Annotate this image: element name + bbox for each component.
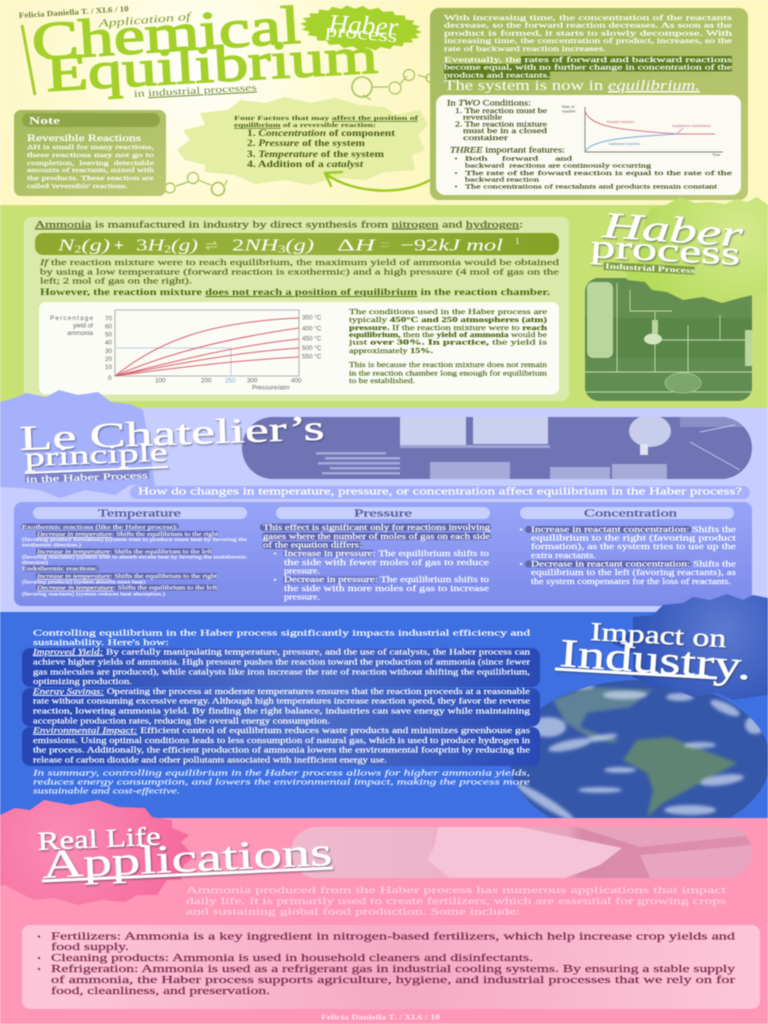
- chart: rate of reaction vs time: Rate of: [562, 105, 575, 109]
- column: temperature: [21, 507, 248, 598]
- panel: four factors: 3. Temperature of the system: [247, 149, 385, 159]
- temperature text: (favoring products) (system absorbs more heat): [22, 580, 145, 586]
- panel: haber synthesis: [24, 217, 569, 401]
- equation: =: [380, 236, 390, 254]
- chart: yield of ammonia vs pressure: 350 °C: [302, 314, 322, 322]
- pressure text: Increase in pressure: The equilibrium shifts to: [284, 549, 489, 558]
- impact paragraphs: achieve higher yields of ammonia. High pressure pushes the reaction toward the production of ammonia (since fewer: [33, 657, 530, 666]
- temperature text: Increase in temperature : Shifts the equilibrium to the right: [36, 573, 218, 580]
- concentration text: equilibrium to the right (favoring product: [531, 534, 737, 542]
- impact paragraphs: [32, 647, 531, 764]
- panel: applications list: Refrigeration: Ammonia is used as a refrigerant gas in industrial cooling systems. By ensuring a stable supply: [51, 964, 735, 975]
- note body: these reactions may not go to: [27, 152, 155, 159]
- pressure text: the side with fewer moles of gas to reduce: [284, 558, 490, 567]
- note body: [27, 144, 155, 190]
- heading le chatelier: Le Chatelier’s: [19, 408, 325, 458]
- subtitle industrial processes: in industrial processes: [134, 83, 257, 100]
- badge: impact on industry: [555, 594, 768, 700]
- concentration text: [520, 525, 737, 586]
- tag: in the haber process: [25, 471, 149, 483]
- badge: le chatelier heading: [0, 390, 325, 498]
- title block: [19, 0, 379, 103]
- chart: rate of reaction vs time: equilibrium established: [672, 124, 711, 128]
- chart: rate of reaction vs time: [562, 105, 723, 157]
- panel: four factors: 4. Addition of a catalyst: [247, 159, 364, 169]
- conditions paragraph: pressure. If the reaction mixture were to reach: [349, 324, 547, 332]
- equation: 2: [164, 244, 171, 256]
- pressure text: pressure.: [284, 566, 320, 576]
- factors list: 1. Concentration of component: [247, 128, 395, 138]
- box: environmental impact: [22, 727, 540, 766]
- column: pressure: [260, 507, 491, 602]
- underline: [555, 669, 717, 678]
- badge: le chatelier heading: in the Haber Process: [26, 471, 148, 485]
- panel: applications list: Cleaning products: Ammonia is used in household cleaners and disinfectants.: [51, 953, 533, 964]
- box: improved yield: [22, 648, 540, 687]
- explanation paragraph: product is formed, it starts to slowly decompose. With: [444, 28, 732, 38]
- question banner: How do changes in temperature, pressure, or concentration affect equilibrium in the Haber process?: [138, 486, 743, 498]
- summary: [31, 768, 531, 796]
- chart: yield of ammonia vs pressure: 250: [225, 378, 236, 384]
- white card: conditions: [436, 95, 741, 195]
- question banner: [130, 486, 750, 499]
- pressure text: This effect is significant only for reactions involving: [263, 523, 490, 532]
- ammonia intro: Ammonia is manufactured in industry by direct synthesis from nitrogen and hydrogen :: [35, 220, 523, 230]
- chart: yield of ammonia vs pressure: Percentage: [50, 315, 93, 322]
- chart: yield of ammonia vs pressure: yield of: [73, 322, 93, 330]
- temperature text: (favoring reactants) (system reduces heat absorption.): [22, 592, 166, 598]
- icon: molecule right: [352, 70, 434, 100]
- white card: [39, 302, 559, 394]
- conditions text: The rate of the foward reaction is equal to the rate of the: [465, 170, 732, 177]
- temperature text: Decrease in temperature : Shifts the equilibrium to the right: [36, 531, 218, 538]
- chart: yield of ammonia vs pressure: 30: [105, 348, 113, 355]
- badge: real life applications: [0, 800, 333, 905]
- note body: amounts of reactants, mixed with: [27, 167, 155, 174]
- note heading: Reversible Reactions: [27, 134, 141, 144]
- concentration text: Decrease in reactant concentration: Shifts the: [531, 560, 737, 568]
- temperature text: (favoring product formation) (system tries to produce more heat by favoring the: [22, 538, 247, 543]
- section background: chemical equilibrium: [0, 0, 768, 205]
- temperature text: Exothermic reactions (like the Haber process):: [22, 524, 178, 531]
- pressure text: pressure.: [284, 592, 320, 602]
- column: concentration: Concentration: [584, 508, 677, 520]
- applications intro: [186, 885, 726, 918]
- conditions paragraph: The conditions used in the Haber process are: [349, 308, 547, 316]
- equation: +: [114, 236, 124, 254]
- chart: rate of reaction vs time: Time: [712, 153, 720, 157]
- intro: [33, 628, 531, 647]
- icon: molecule left: [165, 172, 227, 196]
- heading industry: Industry.: [558, 630, 753, 688]
- box: energy savings: [22, 688, 540, 726]
- title chemical: Chemical: [30, 0, 302, 72]
- badge: haber process heading: [590, 197, 768, 303]
- conditions text: Both forward and: [465, 156, 573, 162]
- equation: (g): [171, 236, 198, 254]
- badge: haber process: Haber: [327, 9, 400, 42]
- yield paragraph: left; 2 mol of gas on the right).: [40, 276, 192, 286]
- impact paragraphs: the process. Additionally, the efficient production of ammonia lowers the environmental footprint by reducing the: [33, 746, 531, 755]
- conditions paragraph: just over 30%. In practice, the yield is: [347, 338, 547, 346]
- impact paragraphs: optimizing production.: [33, 677, 132, 686]
- temperature text: Increase in temperature : Shifts the equilibrium to the left: [36, 548, 212, 556]
- yield paragraph: If the reaction mixture were to reach equilibrium, the maximum yield of ammonia would be obtained: [39, 257, 560, 267]
- temperature text: Endothermic reactions:: [22, 566, 98, 572]
- note body: the products. These reaction are: [27, 175, 154, 182]
- conditions text: must be in a closed: [463, 128, 548, 135]
- chart: yield of ammonia vs pressure: 450 °C: [302, 334, 322, 342]
- column: concentration: [520, 507, 737, 586]
- chart: rate of reaction vs time: forward reaction: [607, 120, 634, 124]
- equation: ⇌: [205, 237, 218, 254]
- highlight bars: [21, 524, 218, 590]
- heading haber: Haber: [600, 205, 745, 256]
- chart: yield of ammonia vs pressure: 50: [105, 332, 113, 338]
- equation: −92 kJ mol: [400, 236, 503, 254]
- heading process: process: [590, 229, 741, 273]
- equation: (g): [81, 236, 110, 254]
- summary: reduces energy consumption, and lowers the environmental impact, making the process more: [33, 777, 531, 786]
- conditions paragraph: equilibrium, then the yield of ammonia would be: [349, 331, 547, 339]
- impact paragraphs: emissions. Using optimal conditions leads to less consumption of natural gas, which is used to produce hydrogen in: [33, 736, 530, 745]
- chart: yield of ammonia vs pressure: 0: [108, 375, 112, 382]
- explanation paragraph: Eventually, the rates of forward and backward reactions: [444, 55, 732, 64]
- temperature text: (favoring reactants) (system tries to absorb excess heat by favoring the endothermic: [22, 556, 248, 560]
- author line: Felicia Daniella T. / XI.6 / 10: [19, 4, 129, 20]
- panel: applications list: of ammonia, the Haber process supports agriculture, hygiene, and industrial processes that we rely on for: [51, 975, 736, 986]
- concentration text: equilibrium to the left (favoring reactants), as: [531, 568, 736, 577]
- chart: rate of reaction vs time: reaction: [562, 110, 576, 114]
- temperature text: direction): [22, 561, 49, 566]
- conditions text: backward reaction: [465, 176, 540, 184]
- chart: yield of ammonia vs pressure: 100: [155, 378, 166, 384]
- chart: rate of reaction vs time: backward reaction: [609, 142, 640, 146]
- conditions paragraph: in the reaction chamber long enough for equilibrium: [349, 370, 548, 378]
- industrial process tag: [604, 262, 695, 275]
- panel: applications list: [22, 925, 760, 1009]
- conditions text: backward reactions are continously occurring: [465, 162, 652, 170]
- impact paragraphs: Environmental Impact: Efficient control of equilibrium reduces waste products and minimizes greenhouse gas: [32, 726, 530, 735]
- explanation paragraph: [444, 13, 733, 80]
- conditions paragraph: approximately 15%.: [349, 347, 433, 355]
- panel: impact text: [22, 628, 540, 796]
- equation: 2: [74, 244, 81, 256]
- explanation paragraph: With increasing time, the concentration of the reactants: [444, 13, 732, 22]
- badge: haber process: [299, 2, 423, 54]
- panel: factors effects: [14, 502, 752, 606]
- intro: sustainability. Here's how:: [33, 637, 169, 647]
- section background: le chatelier: [0, 408, 768, 613]
- panel: four factors: 2. Pressure of the system: [247, 138, 366, 148]
- pressure text: [263, 523, 491, 602]
- heading real life: Real Life: [37, 822, 161, 856]
- note body: called 'reversible' reactions.: [27, 183, 128, 190]
- impact paragraphs: gas molecules are produced), while catalysts like iron increase the rate of reaction without shifting the equilibrium,: [33, 667, 530, 676]
- concentration text: extra reactants.: [531, 551, 596, 560]
- badge: haber process heading: Industrial Process: [605, 262, 695, 275]
- note header: [22, 113, 160, 127]
- chart: yield of ammonia vs pressure: 70: [105, 316, 113, 322]
- conditions text: 1. The reaction must be: [455, 108, 547, 115]
- chart: yield of ammonia vs pressure: [50, 310, 322, 392]
- applications intro: daily life. It is primarily used to create fertilizers, which are essential for growing crops: [186, 896, 726, 907]
- panel: applications list: Fertilizers: Ammonia is a key ingredient in nitrogen-based fertilizers, which help increase crop yields and: [51, 932, 735, 942]
- summary: sustainable and cost-effective.: [33, 787, 180, 796]
- pressure text: of the equation differs:: [263, 540, 362, 550]
- highlight bars: [260, 524, 491, 584]
- conditions text: container: [463, 135, 509, 142]
- chart: yield of ammonia vs pressure: 300: [247, 378, 258, 384]
- arrow: factors pointer: [325, 172, 430, 191]
- intro: Controlling equilibrium in the Haber process significantly impacts industrial efficiency and: [33, 628, 531, 638]
- heading impact on: Impact on: [590, 617, 727, 653]
- concentration text: Increase in reactant concentration: Shifts the: [531, 525, 737, 534]
- equation: 3: [278, 244, 285, 256]
- equation: (g): [285, 236, 314, 254]
- however statement: However, the reaction mixture does not reach a position of equilibrium in the reaction chamber.: [40, 287, 550, 298]
- chart: yield of ammonia vs pressure: 40: [105, 340, 113, 346]
- impact paragraphs: rate without consuming excessive energy. Although high temperatures increase reaction speed, they favor the reverse: [33, 697, 531, 706]
- badge: haber process: process: [325, 20, 398, 46]
- heading principle: principle: [24, 438, 168, 472]
- panel: applications list: food, cleanliness, and preservation.: [51, 986, 270, 997]
- explanation paragraph: become equal, with no further change in concentration of the: [444, 62, 733, 72]
- temperature text: [22, 524, 248, 598]
- equation: 3H: [136, 236, 160, 254]
- equation: 2NH: [232, 236, 268, 254]
- summary: In summary, controlling equilibrium in the Haber process allows for higher ammonia yields,: [31, 768, 530, 777]
- impact paragraphs: Energy Savings: Operating the process at moderate temperatures ensures that the reaction proceeds at a reasonable: [32, 687, 531, 696]
- factors intro: Four Factors that may affect the position of: [234, 115, 419, 122]
- image: earth globe: [510, 680, 768, 818]
- chart: yield of ammonia vs pressure: 400: [291, 378, 302, 384]
- photo: haber apparatus: [585, 278, 752, 401]
- equation: Δ H: [337, 236, 378, 254]
- conditions text: THREE important features:: [450, 146, 565, 154]
- panel: applications list: food supply.: [51, 942, 129, 953]
- chart: yield of ammonia vs pressure: 200: [201, 378, 212, 384]
- impact paragraphs: reaction, lowering ammonia yield. By finding the right balance, industries can save energy while maintaining: [33, 707, 530, 716]
- equation: [35, 233, 559, 256]
- pressure text: the side with more moles of gas to increase: [284, 584, 490, 593]
- explanation paragraph: increasing time, the concentration of product, increases, so the: [444, 36, 733, 45]
- panel: four factors: equilibrium of a reversible reaction:: [234, 122, 376, 129]
- chart: yield of ammonia vs pressure: Pressure/atm: [252, 384, 289, 392]
- conditions text: The concentrations of reactahnts and products remain constant: [465, 184, 717, 190]
- note body: completion, leaving detectable: [27, 160, 154, 167]
- chart: yield of ammonia vs pressure: 500 °C: [302, 344, 322, 352]
- conditions text: 2. The reaction mixture: [455, 122, 547, 128]
- panel: note: [14, 110, 166, 196]
- conditions text: In TWO Conditions:: [447, 98, 531, 108]
- explanation paragraph: decrease, so the forward reaction decreases. As soon as the: [444, 20, 733, 30]
- temperature text: exothermic direction.): [22, 544, 81, 548]
- section background: real life applications: [0, 818, 768, 1024]
- underline: [25, 467, 168, 473]
- section background: impact on industry: [0, 612, 768, 819]
- chart: yield of ammonia vs pressure: 60: [105, 324, 113, 330]
- title equilibrium: Equilibrium: [44, 28, 379, 103]
- conditions text: reversible: [463, 114, 502, 122]
- temperature text: Decrease in temperature : Shifts the equilibrium to the left: [36, 584, 218, 592]
- title accent line: [22, 25, 35, 95]
- explanation paragraph: products and reactants.: [444, 70, 550, 80]
- impact paragraphs: release of carbon dioxide and other pollutants associated with inefficient energy use.: [33, 755, 387, 764]
- panel: equilibrium explanation: [430, 8, 748, 200]
- chart: yield of ammonia vs pressure: 550 °C: [302, 352, 322, 360]
- footer credit: Felicia Daniella T. / XI.6 / 10: [321, 1014, 441, 1022]
- impact paragraphs: Improved Yield: By carefully manipulating temperature, pressure, and the use of catalysts, the Haber process can: [32, 647, 530, 656]
- pressure text: gases where the number of moles of gas on each side: [263, 532, 491, 541]
- conditions paragraph: [347, 308, 548, 385]
- conditions paragraph: to be established.: [349, 377, 415, 385]
- equation: 1: [515, 236, 520, 246]
- panel: four factors: [177, 97, 428, 185]
- concentration text: formation), as the system tries to use up the: [531, 542, 737, 551]
- photo: le chatelier: [242, 415, 755, 479]
- column: pressure: Pressure: [354, 508, 413, 520]
- yield paragraph: by using a low temperature (forward reaction is exothermic) and a high pressure (4 mol of gas on the: [40, 266, 559, 276]
- impact paragraphs: acceptable production rates, reducing the overall energy consumption.: [33, 716, 330, 725]
- heading applications: Applications: [41, 829, 333, 887]
- photo: fertilizer pellets: [291, 827, 752, 878]
- section background: haber process: [0, 205, 768, 408]
- chart: yield of ammonia vs pressure: ammonia: [67, 330, 93, 337]
- highlight bars: [521, 56, 732, 64]
- note body: ΔH is small for many reactions,: [27, 144, 155, 151]
- explanation paragraph: rate of backward reaction increases.: [444, 44, 606, 53]
- equation: N: [58, 236, 69, 254]
- chart: yield of ammonia vs pressure: 10: [105, 364, 113, 371]
- subtitle application of: Application of: [97, 11, 194, 30]
- concentration text: the system compensates for the loss of reactants.: [531, 577, 731, 586]
- column: temperature: Temperature: [98, 508, 182, 520]
- chart: yield of ammonia vs pressure: 20: [105, 356, 113, 363]
- applications intro: and sustaining global food production. Some include:: [186, 907, 520, 918]
- pressure text: Decrease in pressure: The equilibrium shifts to: [284, 575, 489, 584]
- conditions paragraph: This is because the reaction mixture does not remain: [349, 361, 548, 369]
- equilibrium statement: The system is now in equilibrium.: [444, 78, 700, 94]
- conditions paragraph: typically 450°C and 250 atmospheres (atm): [349, 316, 548, 324]
- conditions text: [447, 98, 732, 190]
- highlight bars: [525, 526, 691, 568]
- applications intro: Ammonia produced from the Haber process has numerous applications that impact: [186, 885, 726, 896]
- chart: yield of ammonia vs pressure: 400 °C: [302, 324, 322, 332]
- yield paragraph: [39, 257, 560, 286]
- panel: note: Note: [29, 116, 61, 127]
- underline: [42, 868, 333, 881]
